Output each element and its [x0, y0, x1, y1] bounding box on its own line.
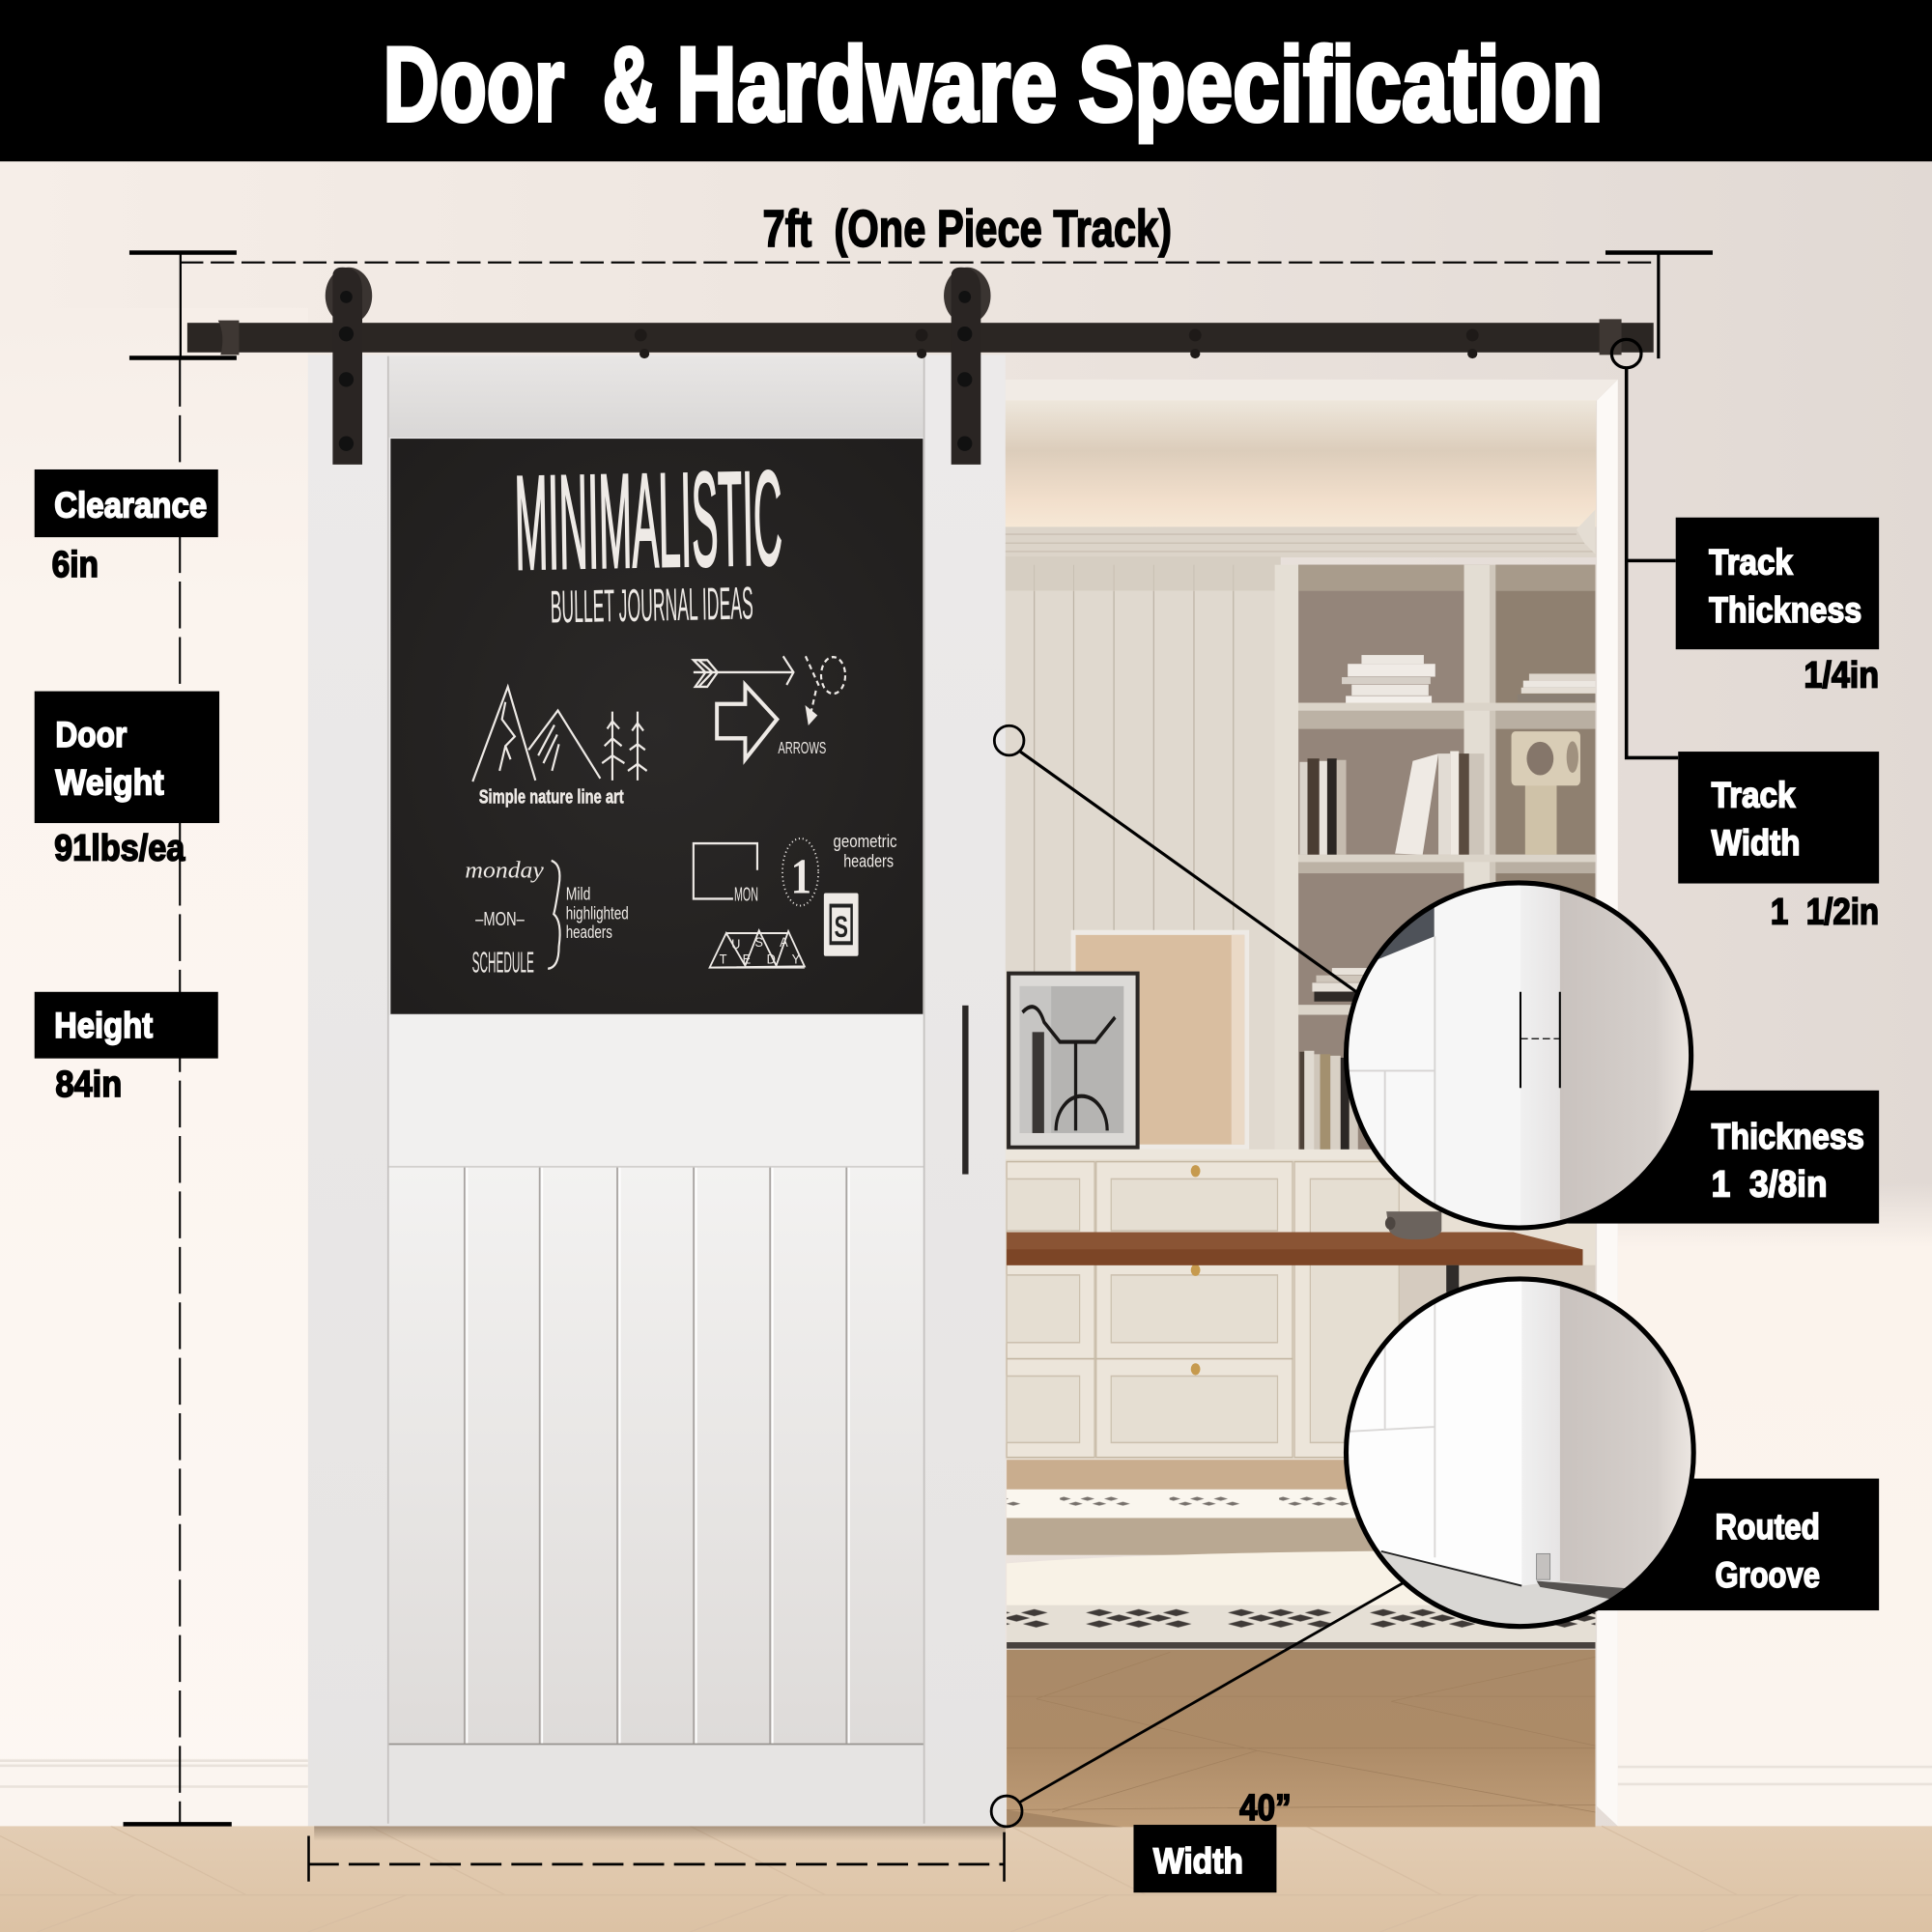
label: track width: Width: [1712, 823, 1801, 863]
chalk square badge: [824, 893, 859, 956]
hardwood: [1007, 1650, 1595, 1827]
chalk bunting: Y: [792, 952, 800, 967]
label: width: [1133, 1825, 1276, 1892]
barn door track: [187, 319, 1654, 358]
leader: routed groove: [991, 1582, 1405, 1827]
rug: [1007, 1490, 1595, 1649]
label: height: [35, 992, 218, 1059]
label: routed groove box: [1589, 1479, 1879, 1610]
value: door weight: 91lbs/ea: [54, 827, 185, 868]
chalkboard panel: –MON–: [475, 908, 525, 930]
value: height: 84in: [55, 1064, 122, 1105]
label: clearance: [35, 469, 218, 537]
chalkboard panel: MINIMALISTIC: [514, 443, 783, 597]
lower room: cabinets, desk, rug and floor: [1005, 1159, 1595, 1827]
crown corner: [1577, 510, 1595, 554]
floor beyond: [1007, 1460, 1595, 1490]
label: thickness box: [1540, 1091, 1879, 1224]
title text: Door: [384, 26, 564, 144]
magnifier: door thickness: [1343, 880, 1695, 1233]
roller hanger left: [326, 268, 372, 465]
magnifier: routed groove: [1343, 1276, 1700, 1632]
chalk bunting: [710, 930, 805, 968]
title text: Hardware: [676, 26, 1057, 144]
value: track width: 1 1/2in: [1771, 892, 1879, 933]
label: height: Height: [54, 1006, 153, 1045]
label: door weight: [35, 692, 219, 823]
chalk number badge: 1: [791, 848, 811, 904]
title text: &: [603, 26, 657, 144]
thickness dimension marks: [1520, 992, 1560, 1088]
door shadow on hardwood: [1007, 1809, 1122, 1827]
chalk caption highlighted headers: Mild: [566, 884, 590, 904]
chalk bunting: U: [731, 936, 740, 952]
chalkboard panel: MON: [734, 884, 758, 906]
track length dimension: [129, 201, 1713, 358]
title banner: [0, 0, 1932, 161]
value: width: 40”: [1239, 1787, 1292, 1829]
title text: Specification: [1078, 26, 1603, 144]
chalk bunting: S: [754, 934, 763, 950]
value: track thickness: 1/4in: [1804, 655, 1879, 696]
height dimension: [124, 359, 232, 1824]
lower shelf books: [1299, 968, 1368, 1151]
baseboard right: [1618, 1765, 1932, 1826]
sliding barn door: [308, 355, 1006, 1826]
bowl: [1385, 1211, 1441, 1239]
chalkboard panel: BULLET JOURNAL IDEAS: [550, 577, 753, 633]
chalk bunting: T: [720, 952, 726, 967]
chalk frame header: [694, 843, 757, 898]
middle rail: [388, 1015, 924, 1166]
chalkboard panel: SCHEDULE: [472, 946, 534, 980]
chalk caption nature: Simple nature line art: [479, 786, 624, 809]
label: door weight: Weight: [55, 763, 164, 803]
title text: [384, 26, 1603, 144]
chalk caption arrows: ARROWS: [778, 738, 826, 757]
chalk header samples: monday: [465, 858, 545, 884]
width dimension: [308, 1833, 1005, 1882]
chalkboard panel: [390, 439, 923, 1014]
chalk square badge: S: [835, 911, 848, 944]
desk: [1007, 1233, 1582, 1293]
leaning art frame: [1071, 930, 1249, 1150]
label: routed groove box: Groove: [1716, 1555, 1820, 1595]
roller hanger right: [944, 268, 991, 465]
chalkboard panel: headers: [843, 851, 894, 871]
label: track thickness: Track: [1709, 542, 1793, 582]
label: track thickness: Thickness: [1709, 590, 1861, 630]
label: routed groove box: Routed: [1716, 1507, 1820, 1547]
label: width: Width: [1153, 1841, 1243, 1881]
upright books: [1299, 752, 1484, 855]
right wall lower glow: [1618, 1182, 1932, 1826]
chalkboard panel: headers: [566, 922, 612, 942]
bottom rail: [388, 1744, 924, 1826]
chalk bunting: A: [780, 934, 789, 950]
door slab: [308, 355, 1006, 1826]
leader: door thickness: [994, 725, 1361, 996]
left wall: [0, 308, 308, 1826]
plank panel: [388, 1167, 924, 1744]
track leader lines: [1611, 339, 1678, 757]
label: door weight: Door: [55, 715, 127, 754]
shelves backs: [1298, 565, 1464, 703]
room interior seen through doorway: [1005, 382, 1596, 1827]
upper room: ceiling, wall panelling and shelves: [1005, 382, 1596, 1160]
value: clearance: 6in: [52, 544, 99, 585]
sculpture: [1512, 731, 1580, 855]
chalk number badge: [782, 838, 818, 906]
label: track width: Track: [1712, 775, 1796, 814]
chalk caption geometric: geometric: [834, 831, 897, 851]
label: thickness box: 1 3/8in: [1712, 1164, 1828, 1206]
book stacks: [1342, 655, 1435, 703]
chalkboard panel: highlighted: [566, 903, 629, 923]
label: clearance: Clearance: [54, 486, 207, 526]
baseboard left: [0, 1758, 308, 1826]
door shadow on floor: [314, 1826, 1006, 1841]
track length label: 7ft (One Piece Track): [763, 201, 1172, 258]
door jamb right: [1006, 380, 1618, 1826]
chalk bunting: E: [743, 952, 751, 967]
label: track width: [1678, 752, 1879, 884]
floor: [0, 1826, 1932, 1932]
bicycle photo frame: [1007, 972, 1140, 1150]
label: thickness box: Thickness: [1712, 1117, 1864, 1156]
label: track thickness: [1676, 518, 1879, 649]
top rail: [388, 356, 924, 438]
chalk bunting: D: [767, 952, 776, 967]
chalk mountains and trees: [472, 687, 647, 781]
door handle: [962, 1006, 969, 1175]
chalk arrows: [694, 656, 845, 759]
